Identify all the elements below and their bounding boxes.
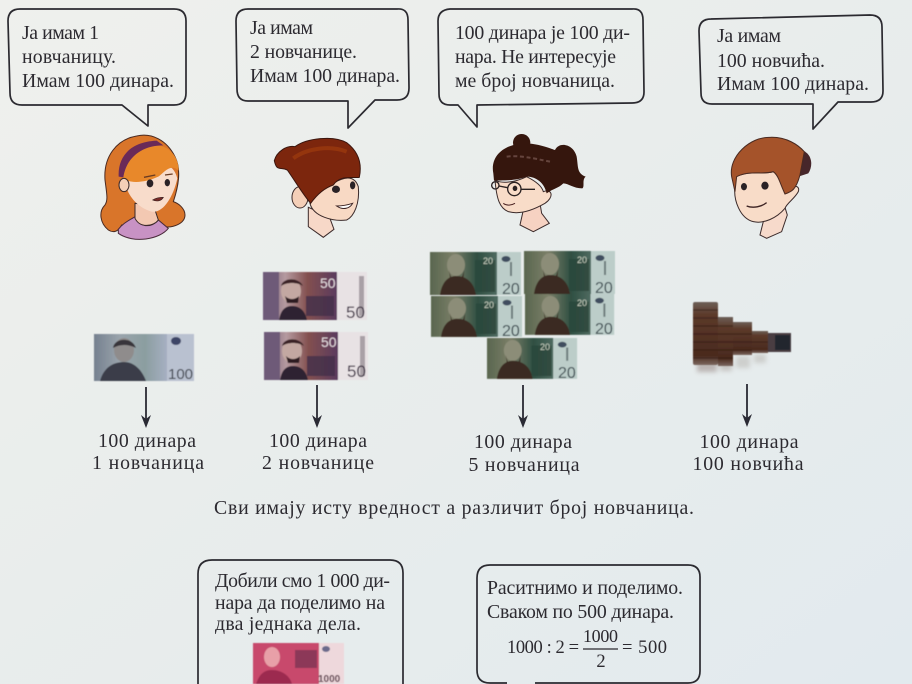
speech bubble: one hundred coins: 100 новчића. — [717, 50, 825, 72]
summary sentence: Сви имају исту вредност а различит број новчаница. — [214, 497, 694, 519]
caption: column 4: 100 динара — [700, 431, 799, 453]
banknote: 50 dinars, upper — [263, 272, 367, 322]
speech bubble: two banknotes: Имам 100 динара. — [250, 65, 400, 87]
speech bubble: one banknote — [8, 9, 186, 126]
caption: column 1: 1 новчаница — [92, 452, 204, 474]
banknotes: five 20 dinar notes: 20 — [540, 342, 550, 352]
caption: column 1 — [92, 430, 204, 474]
speech bubble: one banknote: Имам 100 динара. — [22, 70, 174, 92]
speech bubble: one hundred coins: Имам 100 динара. — [717, 73, 869, 95]
banknotes: five 20 dinar notes: 20 — [502, 281, 520, 298]
arrow 2 — [312, 385, 322, 428]
banknote: 50 dinars, upper: 50 — [346, 303, 365, 322]
character: boy with brown hair — [731, 137, 811, 238]
banknote: 100 dinars: 100 — [168, 366, 193, 383]
panel: solution: Раситнимо и поделимо. — [487, 577, 683, 599]
character: boy with dark red hair — [274, 138, 360, 237]
speech bubble: value not count: 100 динара је 100 ди- — [455, 22, 630, 44]
panel: 1000 dinar problem: два једнака дела. — [215, 613, 361, 635]
equation — [507, 626, 667, 672]
banknote: 50 dinars, upper: 50 — [320, 275, 336, 291]
banknotes: five 20 dinar notes: 20 — [595, 321, 613, 338]
character: girl with glasses and ponytail — [492, 134, 586, 232]
panel: 1000 dinar problem: нара да поделимо на — [215, 592, 385, 614]
equation: 1000 — [583, 626, 618, 646]
arrow 1 — [141, 387, 151, 428]
caption: column 2: 100 динара — [269, 430, 367, 452]
speech bubble: two banknotes — [236, 9, 409, 128]
banknote: 1000 dinars — [253, 643, 344, 684]
coin stacks — [693, 302, 791, 372]
caption: column 4 — [692, 431, 804, 475]
banknotes: five 20 dinar notes: 20 — [577, 298, 587, 308]
banknotes: five 20 dinar notes: 20 — [502, 323, 520, 340]
speech bubble: one hundred coins: Ја имам — [717, 25, 781, 47]
banknotes: five 20 dinar notes — [430, 251, 615, 382]
caption: column 3: 100 динара — [474, 431, 572, 453]
caption: column 3 — [468, 431, 580, 476]
banknote: 50 dinars, lower: 50 — [321, 334, 337, 350]
speech bubble: value not count: нара. Не интересује — [455, 46, 616, 68]
caption: column 1: 100 динара — [98, 430, 196, 452]
caption: column 2: 2 новчанице — [262, 452, 374, 474]
banknotes: five 20 dinar notes: 20 — [595, 280, 613, 297]
banknotes: five 20 dinar notes: 20 — [558, 365, 576, 382]
speech bubble: one banknote: Ја имам 1 — [22, 22, 99, 44]
banknote: 50 dinars, lower — [264, 332, 368, 381]
caption: column 4: 100 новчића — [692, 453, 804, 475]
banknotes: five 20 dinar notes: 20 — [483, 256, 493, 266]
equation: 2 — [596, 652, 606, 672]
panel: solution: Сваком по 500 динара. — [487, 601, 674, 623]
speech bubble: two banknotes: 2 новчанице. — [250, 41, 357, 63]
caption: column 3: 5 новчаница — [468, 454, 580, 476]
arrow 3 — [518, 385, 528, 428]
speech bubble: two banknotes: Ја имам — [250, 17, 313, 39]
character: girl with orange hair — [101, 135, 185, 239]
speech bubble: one hundred coins — [699, 15, 883, 129]
banknote: 50 dinars, lower: 50 — [347, 362, 366, 381]
equation: = 500 — [622, 638, 667, 658]
panel: 1000 dinar problem — [198, 560, 403, 684]
banknote: 100 dinars — [94, 334, 194, 383]
arrow 4 — [742, 384, 752, 427]
equation: 1000 : 2 = — [507, 638, 579, 658]
speech bubble: value not count: ме број новчаница. — [455, 70, 615, 92]
banknotes: five 20 dinar notes: 20 — [577, 255, 587, 265]
speech bubble: one banknote: новчаницу. — [22, 46, 116, 68]
banknotes: five 20 dinar notes: 20 — [484, 300, 494, 310]
panel: 1000 dinar problem: Добили смо 1 000 ди- — [215, 570, 390, 592]
caption: column 2 — [262, 430, 374, 474]
speech bubble: value not count — [438, 9, 644, 127]
panel: solution — [477, 565, 700, 683]
